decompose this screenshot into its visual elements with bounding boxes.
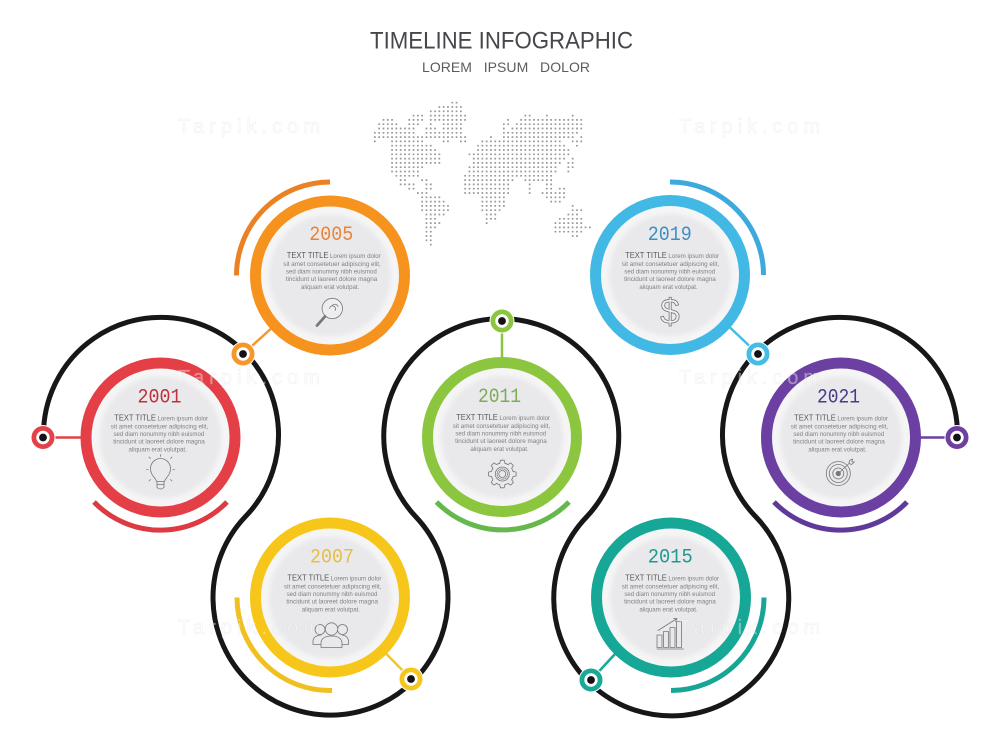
text block: aliquam erat volutpat. [301,284,359,291]
text block [283,250,381,291]
text block: sit amet consetetuer adipiscing elit, [283,261,381,268]
text block: TEXT TITLE [794,413,836,423]
grey disc [269,536,391,658]
title: TIMELINE INFOGRAPHIC [370,28,633,54]
watermarks: Tarpik.com [178,116,320,138]
text block: tincidunt ut laoreet dolore magna [793,439,885,446]
black timeline path [43,317,958,716]
text block: TEXT TITLE [114,413,156,423]
node [578,668,604,692]
text block [284,573,382,613]
text block [622,250,720,291]
connector [919,436,957,439]
ring [428,362,576,512]
icon: target [826,459,854,486]
text block: sed diam nonummy nibh euismod [286,269,377,276]
text block: tincidunt ut laoreet dolore magna [286,599,378,606]
connector [44,436,82,439]
grey disc [610,536,732,658]
text block: aliquam erat volutpat. [639,606,698,613]
card: 2005 [230,182,404,366]
year: 2001 [138,386,182,410]
card: 2015 [578,523,764,692]
text block: Lorem ipsum dolor [668,253,720,260]
text block: sit amet consetetuer adipiscing elit, [453,423,550,430]
text block [111,413,209,453]
year: 2011 [478,386,521,409]
card: 2019 [596,182,770,366]
text block: sit amet consetetuer adipiscing elit, [622,583,719,590]
year: 2019 [648,224,692,247]
node [944,425,970,450]
text block: tincidunt ut laoreet dolore magna [624,599,716,606]
card: 2001 [30,363,235,530]
inner disc [771,368,911,508]
card: 2007 [237,523,424,692]
watermarks: Tarpik.com [178,617,320,639]
connector [243,320,280,354]
ring [256,201,404,350]
year: 2007 [310,546,354,570]
grey disc [100,376,222,498]
outer arc [236,182,330,276]
node [746,342,770,366]
watermarks: Tarpik.com [178,367,320,389]
text block: TEXT TITLE [287,250,329,260]
icon: gear [488,460,516,488]
inner disc [601,528,741,668]
text block: aliquam erat volutpat. [808,446,867,453]
text block: tincidunt ut laoreet dolore magna [624,276,716,283]
outer arc [94,502,227,530]
text block: Lorem ipsum dolor [668,576,720,583]
text block: sit amet consetetuer adipiscing elit, [791,423,888,430]
inner disc [260,528,400,668]
text block: aliquam erat volutpat. [302,606,360,613]
watermarks: Tarpik.com [679,617,820,639]
ring [766,363,916,512]
outer arc [670,182,764,275]
inner disc [90,368,230,508]
subtitle: LOREM IPSUM DOLOR [422,59,590,75]
card: 2021 [766,363,970,530]
watermarks [178,116,820,639]
text block: Lorem ipsum dolor [158,416,209,423]
text block: TEXT TITLE [625,250,667,260]
text block: tincidunt ut laoreet dolore magna [113,439,205,446]
node [30,425,56,450]
text block: sed diam nonummy nibh euismod [624,269,715,276]
text block: tincidunt ut laoreet dolore magna [286,276,378,283]
outer arc [671,598,764,690]
text block [622,573,720,613]
node [398,666,424,692]
text block: sed diam nonummy nibh euismod [624,591,715,598]
icon: light bulb [146,454,174,489]
outer arc [774,502,907,530]
watermarks: Tarpik.com [679,116,820,138]
text block [791,413,889,453]
text block: sit amet consetetuer adipiscing elit, [111,423,208,430]
outer arc [436,502,569,530]
connector [722,320,758,354]
inner disc [600,205,740,345]
node [490,308,514,334]
text block: Lorem ipsum dolor [330,253,381,260]
text block [453,412,551,453]
text block: Lorem ipsum dolor [837,416,889,423]
inner disc [432,367,572,507]
outer arc [237,598,332,691]
text block: sit amet consetetuer adipiscing elit, [622,261,719,268]
grey disc [780,376,902,498]
watermarks: Tarpik.com [679,367,820,389]
text block: sed diam nonummy nibh euismod [114,431,204,438]
connector [591,648,621,680]
text block: TEXT TITLE [625,573,667,583]
inner disc [260,206,400,346]
text block: aliquam erat volutpat. [128,446,187,453]
text block: sed diam nonummy nibh euismod [793,431,884,438]
text block: sit amet consetetuer adipiscing elit, [284,583,382,590]
icon: magnifier [317,298,342,326]
grey disc [441,376,563,498]
icon: bar chart [657,618,684,649]
text block: tincidunt ut laoreet dolore magna [455,438,547,445]
icon: dollar: $ [660,292,680,332]
text block: TEXT TITLE [287,573,329,583]
card: 2011 [428,308,576,530]
ring [86,363,235,512]
connector [501,321,503,359]
grey disc [269,214,391,336]
text block: TEXT TITLE [456,412,498,422]
text block: Lorem ipsum dolor [499,415,551,422]
text block: aliquam erat volutpat. [470,446,529,453]
text block: sed diam nonummy nibh euismod [287,591,378,598]
year: 2021 [817,386,860,410]
text block: sed diam nonummy nibh euismod [455,431,546,438]
year: 2015 [648,546,693,570]
dotted world map [374,103,591,245]
ring [596,523,746,672]
text block: Lorem ipsum dolor [331,576,382,583]
year: 2005 [309,224,353,247]
grey disc [609,214,731,336]
ring [256,523,404,672]
icon: people [313,623,348,648]
ring [596,200,744,350]
text block: aliquam erat volutpat. [639,284,698,291]
connector [380,648,411,679]
node [230,342,256,366]
